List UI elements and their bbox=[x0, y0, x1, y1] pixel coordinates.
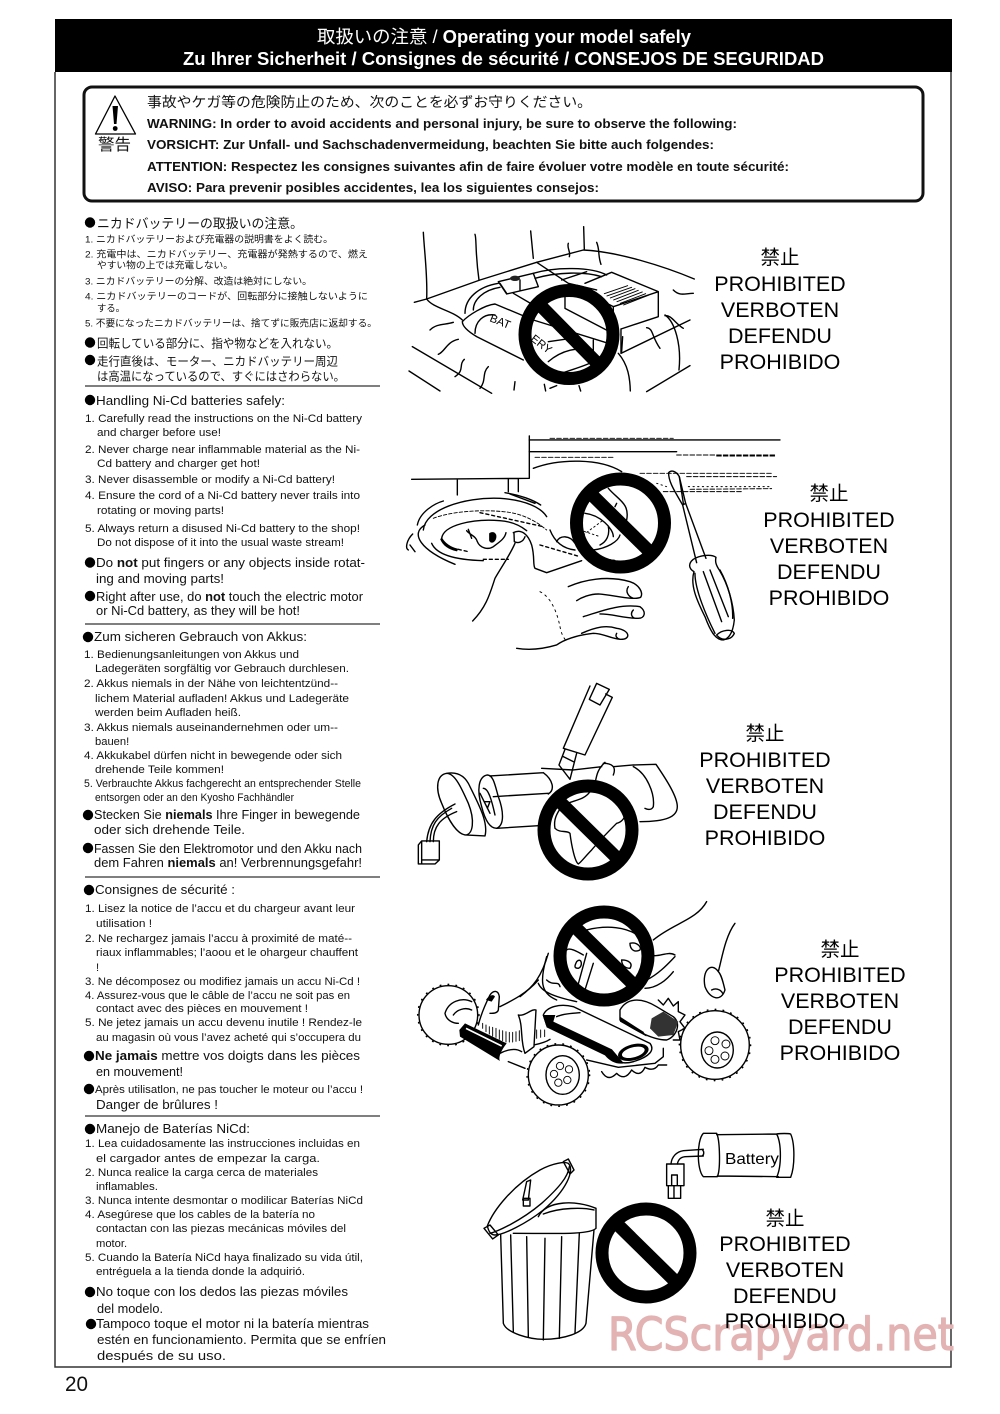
title banner bbox=[55, 19, 952, 72]
illustration: hand near rotating gear with screwdriver bbox=[407, 436, 780, 649]
warning text: AVISO: Para prevenir posibles accidentes, lea los siguientes consejos: bbox=[147, 181, 599, 195]
text block: English instructions: Handling Ni-Cd batteries safely: bbox=[96, 393, 285, 408]
label: prohibited 5 bbox=[719, 1208, 851, 1333]
label: prohibited 3: VERBOTEN bbox=[706, 774, 824, 798]
label: prohibited 4: 禁止 bbox=[820, 939, 860, 961]
text block: English instructions: rotating or moving parts! bbox=[97, 505, 224, 517]
text block: French instructions: riaux inflammables; l’aoou et le ohargeur chauffent bbox=[96, 947, 359, 959]
text block: English instructions: Right after use, do not touch the electric motor bbox=[96, 589, 364, 604]
text block: Japanese instructions: 走行直後は、モーター、ニカドバッテリー周辺 bbox=[97, 354, 338, 368]
text block: English instructions bbox=[85, 393, 365, 618]
label: prohibited 5: 禁止 bbox=[765, 1208, 805, 1230]
text block: Spanish instructions: Tampoco toque el motor ni la batería mientras bbox=[96, 1316, 370, 1331]
icon: battery bbox=[667, 1133, 794, 1198]
label: prohibited 1: PROHIBITED bbox=[714, 272, 846, 296]
text block: English instructions: 2. Never charge near inflammable material as the Ni- bbox=[85, 444, 360, 456]
text block: German instructions: 1. Bedienungsanleitungen von Akkus und bbox=[84, 649, 299, 661]
text block: German instructions: 2. Akkus niemals in der Nähe von leichtentzünd-- bbox=[84, 678, 338, 690]
text block: French instructions: contact avec des pièces en mouvement ! bbox=[96, 1003, 308, 1015]
text block: German instructions: oder sich drehende Teile. bbox=[94, 822, 245, 837]
text block: Japanese instructions: 4. ニカドバッテリーのコードが、回転部分に接触しないように bbox=[85, 290, 368, 302]
text block: Spanish instructions: contactan con las piezas mecánicas móviles del bbox=[96, 1223, 346, 1235]
text block: French instructions: 4. Assurez-vous que le câble de l’accu ne soit pas en bbox=[85, 990, 350, 1002]
illustration: battery and trash can bbox=[484, 1133, 794, 1340]
text block: Spanish instructions: inflamables. bbox=[96, 1181, 158, 1193]
text block: French instructions bbox=[84, 882, 363, 1112]
text block: English instructions: 1. Carefully read the instructions on the Ni-Cd battery bbox=[85, 413, 362, 425]
text block: Japanese instructions: 回転している部分に、指や物などを入れない。 bbox=[97, 336, 338, 350]
illustration: charging battery on a flammable sofa: BAT bbox=[488, 313, 512, 332]
warning text: WARNING: In order to avoid accidents and personal injury, be sure to observe the following: bbox=[147, 117, 737, 131]
icon: prohibition sign bbox=[544, 786, 632, 874]
text block: German instructions: werden beim Aufladen heiß. bbox=[94, 707, 241, 719]
text block: Spanish instructions bbox=[85, 1121, 386, 1363]
text block: German instructions: dem Fahren niemals an! Verbrennungsgefahr! bbox=[94, 855, 362, 870]
text block: English instructions: 3. Never disassemble or modify a Ni-Cd battery! bbox=[85, 474, 335, 486]
label: prohibited 3: 禁止 bbox=[745, 723, 785, 745]
text block: English instructions: 5. Always return a disused Ni-Cd battery to the shop! bbox=[85, 523, 360, 535]
text block: English instructions: 4. Ensure the cord of a Ni-Cd battery never trails into bbox=[85, 490, 360, 502]
text block: French instructions: 2. Ne rechargez jamais l’accu à proximité de maté-- bbox=[85, 933, 352, 945]
label: prohibited 3 bbox=[699, 723, 831, 850]
text block: French instructions: Danger de brûlures ! bbox=[96, 1097, 218, 1112]
label: prohibited 2 bbox=[763, 483, 895, 610]
text block: English instructions: and charger before use! bbox=[97, 427, 221, 439]
text block: French instructions: utilisation ! bbox=[96, 918, 152, 930]
label: prohibited 1: VERBOTEN bbox=[721, 298, 839, 322]
text block: Japanese instructions: ニカドバッテリーの取扱いの注意。 bbox=[97, 216, 303, 231]
label: prohibited 3: DEFENDU bbox=[713, 800, 817, 824]
text block: Japanese instructions: 1. ニカドバッテリーおよび充電器の説明書をよく読む。 bbox=[85, 234, 333, 244]
text block: English instructions: ing and moving parts! bbox=[96, 571, 224, 586]
warning text bbox=[147, 94, 789, 195]
icon: battery: Battery bbox=[725, 1151, 779, 1168]
warning text: VORSICHT: Zur Unfall- und Sachschadenvermeidung, beachten Sie bitte auch folgendes: bbox=[147, 138, 714, 152]
text block: Spanish instructions: 1. Lea cuidadosamente las instrucciones incluidas en bbox=[85, 1138, 360, 1150]
icon: trash can bbox=[484, 1159, 596, 1340]
text block: French instructions: Consignes de sécurité : bbox=[95, 882, 235, 897]
text block: Spanish instructions: motor. bbox=[96, 1238, 127, 1250]
text block: German instructions: bauen! bbox=[95, 736, 129, 748]
illustration: touching hot motor and battery on buggy bbox=[418, 902, 751, 1106]
text block: French instructions: ! bbox=[96, 962, 99, 974]
text block: German instructions: 4. Akkukabel dürfen nicht in bewegende oder sich bbox=[84, 750, 342, 762]
label: prohibited 3: PROHIBIDO bbox=[705, 826, 825, 850]
text block: Spanish instructions: 5. Cuando la Batería NiCd haya finalizado su vida útil, bbox=[85, 1252, 363, 1264]
text block: English instructions: or Ni-Cd battery, as they will be hot! bbox=[96, 603, 300, 618]
page number: 20 bbox=[65, 1373, 88, 1396]
icon: prohibition sign bbox=[560, 912, 648, 1000]
text block: English instructions: Do not put fingers or any objects inside rotat- bbox=[96, 555, 365, 570]
text block: French instructions: 5. Ne jetez jamais un accu devenu inutile ! Rendez-le bbox=[85, 1017, 362, 1029]
text block: English instructions: Cd battery and charger get hot! bbox=[97, 458, 260, 470]
panel: warning box bbox=[84, 87, 923, 201]
label: prohibited 5: PROHIBIDO bbox=[725, 1309, 845, 1333]
text block: German instructions: Fassen Sie den Elektromotor und den Akku nach bbox=[94, 841, 362, 856]
icon: prohibition sign bbox=[576, 479, 664, 567]
label: prohibited 2: 禁止 bbox=[809, 483, 849, 505]
warning text: 事故やケガ等の危険防止のため、次のことを必ずお守りください。 bbox=[147, 94, 592, 110]
text block: Spanish instructions: No toque con los dedos las piezas móviles bbox=[96, 1284, 349, 1299]
text block: French instructions: Après utilisatlon, ne pas toucher le moteur ou l’accu ! bbox=[95, 1084, 363, 1096]
label: prohibited 2: PROHIBIDO bbox=[769, 586, 889, 610]
illustration: cutting a battery pack bbox=[418, 683, 677, 874]
label: prohibited 1: DEFENDU bbox=[728, 324, 832, 348]
text block: Japanese instructions bbox=[85, 216, 377, 384]
text block: German instructions: Zum sicheren Gebrauch von Akkus: bbox=[94, 629, 307, 644]
text block: Japanese instructions: する。 bbox=[97, 302, 125, 314]
text block: Spanish instructions: 2. Nunca realice la carga cerca de materiales bbox=[85, 1167, 318, 1179]
text block: Spanish instructions: después de su uso. bbox=[97, 1348, 226, 1363]
text block: Japanese instructions: やすい物の上では充電しない。 bbox=[97, 260, 233, 270]
text block: Spanish instructions: del modelo. bbox=[97, 1301, 163, 1316]
text block: Spanish instructions: entréguela a la tienda donde la adquirió. bbox=[96, 1266, 305, 1278]
label: prohibited 2: PROHIBITED bbox=[763, 508, 895, 532]
text block: German instructions: Stecken Sie niemals Ihre Finger in bewegende bbox=[94, 807, 360, 822]
title banner: Zu Ihrer Sicherheit / Consignes de sécurité / CONSEJOS DE SEGURIDAD bbox=[183, 49, 824, 69]
label: prohibited 4: VERBOTEN bbox=[781, 989, 899, 1013]
icon: prohibition sign bbox=[602, 1209, 690, 1297]
text block: French instructions: Ne jamais mettre vos doigts dans les pièces bbox=[95, 1048, 361, 1063]
illustration: charging battery on a flammable sofa: ERY bbox=[528, 333, 554, 357]
label: prohibited 2: VERBOTEN bbox=[770, 534, 888, 558]
text block: Japanese instructions: は高温になっているので、すぐにはさわらない。 bbox=[97, 370, 345, 384]
text block: Spanish instructions: 3. Nunca intente desmontar o modilicar Baterías NiCd bbox=[85, 1195, 363, 1207]
label: prohibited 1 bbox=[714, 247, 846, 374]
warning text: ATTENTION: Respectez les consignes suivantes afin de faire évoluer votre modèle en toute sécurité: bbox=[147, 160, 789, 174]
text block: Spanish instructions: el cargador antes de empezar la carga. bbox=[96, 1153, 320, 1165]
text block: German instructions: drehende Teile kommen! bbox=[95, 764, 224, 776]
text block: Japanese instructions: 3. ニカドバッテリーの分解、改造は絶対にしない。 bbox=[85, 276, 312, 286]
label: prohibited 4: DEFENDU bbox=[788, 1015, 892, 1039]
label: prohibited 1: PROHIBIDO bbox=[720, 350, 840, 374]
text block: French instructions: 3. Ne décomposez ou modifiez jamais un accu Ni-Cd ! bbox=[85, 976, 360, 988]
icon: warning triangle bbox=[96, 96, 136, 154]
label: prohibited 3: PROHIBITED bbox=[699, 748, 831, 772]
label: prohibited 4: PROHIBIDO bbox=[780, 1041, 900, 1065]
text block: French instructions: 1. Lisez la notice de l’accu et du chargeur avant leur bbox=[85, 903, 355, 915]
icon: warning triangle: 警告 bbox=[98, 136, 131, 154]
text block: Spanish instructions: 4. Asegúrese que los cables de la batería no bbox=[85, 1209, 315, 1221]
text block: German instructions: lichem Material aufladen! Akkus und Ladegeräte bbox=[95, 693, 349, 705]
text block: Japanese instructions: 5. 不要になったニカドバッテリーは、捨てずに販売店に返却する。 bbox=[85, 318, 377, 328]
text block: Spanish instructions: estén en funcionamiento. Permita que se enfríen bbox=[97, 1332, 386, 1347]
label: prohibited 5: PROHIBITED bbox=[719, 1232, 851, 1256]
text block: French instructions: au magasin où vous l’avez acheté qui s’occupera du bbox=[96, 1032, 361, 1044]
text block: German instructions: 5. Verbrauchte Akkus fachgerecht an entsprechender Stelle bbox=[84, 778, 361, 790]
label: prohibited 5: VERBOTEN bbox=[726, 1258, 844, 1282]
label: prohibited 2: DEFENDU bbox=[777, 560, 881, 584]
text block: German instructions bbox=[83, 629, 362, 870]
text block: German instructions: Ladegeräten sorgfältig vor Gebrauch durchlesen. bbox=[95, 663, 349, 675]
text block: English instructions: Do not dispose of it into the usual waste stream! bbox=[97, 537, 344, 549]
label: prohibited 5: DEFENDU bbox=[733, 1284, 837, 1308]
watermark: RCScrapyard.net bbox=[608, 1308, 954, 1361]
label: prohibited 4 bbox=[774, 939, 906, 1065]
label: prohibited 1: 禁止 bbox=[760, 247, 800, 269]
text block: French instructions: en mouvement! bbox=[96, 1064, 183, 1079]
text block: German instructions: 3. Akkus niemals auseinandernehmen oder um-- bbox=[84, 722, 338, 734]
label: prohibited 4: PROHIBITED bbox=[774, 963, 906, 987]
text block: German instructions: entsorgen oder an den Kyosho Fachhändler bbox=[95, 792, 294, 804]
title banner: 取扱いの注意 / Operating your model safely bbox=[317, 27, 691, 47]
text block: Spanish instructions: Manejo de Baterías NiCd: bbox=[96, 1121, 250, 1136]
illustration: charging battery on a flammable sofa bbox=[409, 227, 694, 393]
text block: Japanese instructions: 2. 充電中は、ニカドバッテリー、充電器が発熱するので、燃え bbox=[85, 248, 368, 260]
icon: prohibition sign bbox=[525, 290, 613, 378]
